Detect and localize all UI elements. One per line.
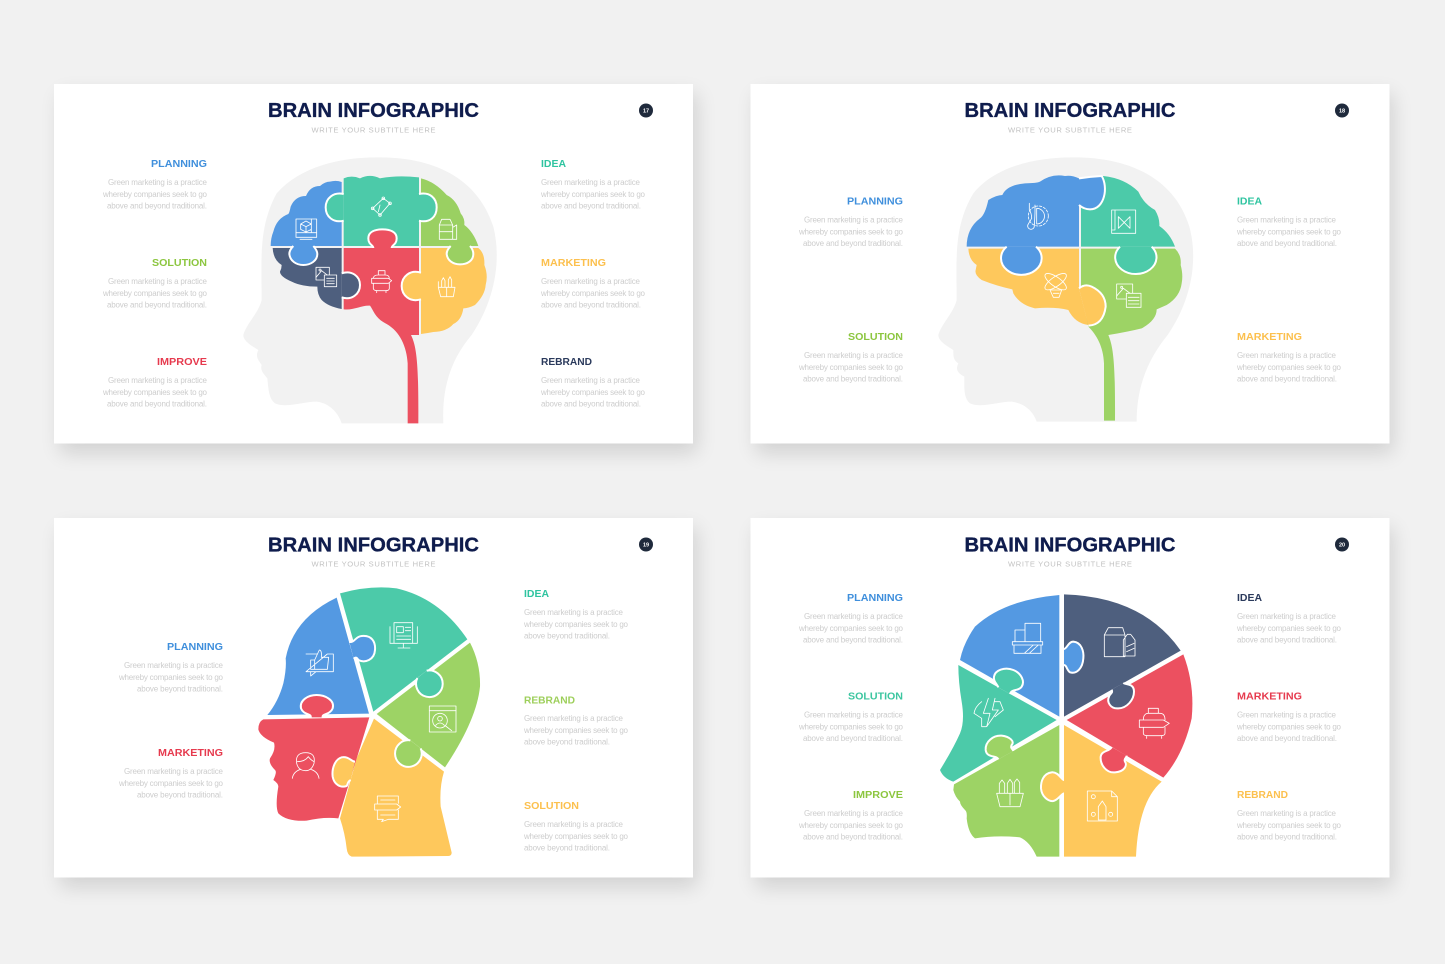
page number: 19 <box>643 542 649 548</box>
text block: improve: Green marketing is a practice <box>804 809 904 818</box>
icon: search browser <box>429 706 456 732</box>
tab: yellow into green <box>1079 285 1106 326</box>
text block: solution: SOLUTION <box>848 332 903 343</box>
card shadow <box>756 94 1393 453</box>
icon: plant pot with pencils <box>438 277 455 297</box>
icon: thumbs up <box>306 650 333 676</box>
text block: idea: whereby companies seek to go <box>1236 624 1342 633</box>
text block: solution <box>798 332 904 384</box>
card <box>54 84 693 444</box>
piece: red <box>1067 654 1192 778</box>
card shadow <box>60 528 697 887</box>
text block: idea: whereby companies seek to go <box>1236 228 1342 236</box>
text block: idea: whereby companies seek to go <box>523 620 629 629</box>
tab: teal into blue <box>326 194 344 221</box>
brain puzzle diagram <box>938 157 1193 422</box>
panel: slide 20 <box>750 518 1393 887</box>
text block: rebrand: REBRAND <box>541 357 592 368</box>
icon: vector pen <box>371 197 391 216</box>
text block: marketing <box>1236 332 1342 384</box>
head silhouette <box>243 157 497 423</box>
panel: slide 18 <box>750 84 1393 453</box>
title: BRAIN INFOGRAPHIC <box>964 100 1176 122</box>
piece: green <box>953 725 1059 857</box>
icon: briefcase pencil <box>1139 708 1169 738</box>
tab: slate into red <box>342 272 360 298</box>
icon: monitor with cube <box>296 219 317 239</box>
text block: marketing: whereby companies seek to go <box>1236 363 1342 372</box>
text block: marketing: MARKETING <box>1237 692 1302 702</box>
tab: blue top right lobe <box>1079 176 1105 209</box>
text block: idea: IDEA <box>1237 593 1263 604</box>
text block: planning: PLANNING <box>847 593 903 604</box>
text block: solution: Green marketing is a practice <box>804 351 904 360</box>
icon: lightning brain <box>974 698 1003 727</box>
tab: red into yellow <box>1101 747 1127 772</box>
page number <box>1335 104 1349 118</box>
text block: idea: Green marketing is a practice <box>541 178 641 187</box>
text block: improve <box>102 357 208 408</box>
text block: solution: SOLUTION <box>152 258 207 269</box>
tab: green into teal <box>986 736 1013 759</box>
tab: teal into green <box>419 194 437 221</box>
text block: rebrand: whereby companies seek to go <box>523 726 629 735</box>
text block: planning: PLANNING <box>151 159 207 170</box>
icon: woman portrait <box>292 753 319 778</box>
text block: idea: Green marketing is a practice <box>1237 216 1337 224</box>
text block: marketing: Green marketing is a practice <box>541 277 641 286</box>
icon: news monitor <box>390 623 417 648</box>
text block: idea: Green marketing is a practice <box>524 608 624 617</box>
brain puzzle diagram <box>243 157 497 423</box>
piece: blue <box>271 181 342 246</box>
piece: blue <box>267 598 369 715</box>
head puzzle diagram <box>258 587 480 857</box>
text block: planning: Green marketing is a practice <box>804 612 904 621</box>
card <box>750 518 1390 878</box>
text block: marketing: Green marketing is a practice <box>124 767 224 776</box>
piece: teal <box>340 587 467 712</box>
text block: idea <box>540 159 646 210</box>
text block: planning: Green marketing is a practice <box>108 178 208 187</box>
text block: solution: whereby companies seek to go <box>523 832 629 841</box>
piece: green with stem <box>1081 249 1182 421</box>
icon: images and sliders <box>1117 284 1141 307</box>
text block: idea: Green marketing is a practice <box>1237 612 1337 621</box>
text block: planning: above beyond traditional. <box>137 684 223 694</box>
tab: blue into slate <box>289 246 317 265</box>
text block: rebrand: Green marketing is a practice <box>524 714 624 723</box>
subtitle: WRITE YOUR SUBTITLE HERE <box>312 560 436 568</box>
text block: rebrand: Green marketing is a practice <box>541 376 641 385</box>
tab: teal into green <box>1115 247 1156 274</box>
text block: solution: Green marketing is a practice <box>804 710 904 720</box>
page number: 18 <box>1339 108 1345 114</box>
tab: blue into yellow <box>1001 247 1042 275</box>
text block: marketing: whereby companies seek to go <box>118 779 224 788</box>
text block: improve: Green marketing is a practice <box>108 376 208 385</box>
tab: green into yellow <box>395 740 422 767</box>
text block: rebrand: whereby companies seek to go <box>1236 821 1342 830</box>
tab: red into teal <box>368 229 397 248</box>
text block: marketing <box>1236 692 1342 743</box>
text block: idea: above and beyond traditional. <box>541 202 641 210</box>
text block: solution: whereby companies seek to go <box>102 289 208 298</box>
text block: marketing: above and beyond traditional. <box>1237 734 1337 743</box>
text block: idea: whereby companies seek to go <box>540 190 646 199</box>
text block: idea: above and beyond traditional. <box>1237 239 1337 248</box>
text block: marketing: above and beyond traditional. <box>541 300 641 310</box>
icon: containers <box>1012 623 1043 653</box>
icon: blueprint <box>1112 210 1136 233</box>
text block: marketing: MARKETING <box>158 748 223 759</box>
text block: planning <box>798 593 904 644</box>
piece: yellow <box>1064 725 1162 857</box>
text block: solution: above and beyond traditional. <box>803 734 903 743</box>
text block: solution: Green marketing is a practice <box>524 820 624 829</box>
piece: yellow <box>968 249 1088 325</box>
page number: 20 <box>1339 542 1345 548</box>
text block: idea: above beyond traditional. <box>524 632 610 640</box>
tab: yellow into green <box>1041 772 1064 801</box>
text block: marketing <box>540 258 646 310</box>
text block: planning: whereby companies seek to go <box>798 228 904 236</box>
text block: planning: above and beyond traditional. <box>803 636 903 644</box>
text block: idea <box>1236 196 1342 248</box>
card shadow <box>60 94 697 453</box>
text block: improve: whereby companies seek to go <box>102 388 208 397</box>
piece: slate <box>1064 594 1181 717</box>
text block: planning <box>118 642 224 694</box>
icon: images and sliders <box>316 267 337 287</box>
tab: teal into green <box>416 670 443 697</box>
text block: planning: PLANNING <box>847 196 903 208</box>
title: BRAIN INFOGRAPHIC <box>964 534 1176 556</box>
icon: packages <box>439 219 457 239</box>
text block: solution: above beyond traditional. <box>524 844 610 852</box>
page number <box>639 538 653 552</box>
piece: teal <box>1081 176 1175 247</box>
text block: solution <box>102 258 208 310</box>
text block: marketing: above beyond traditional. <box>137 790 223 800</box>
text block: planning: PLANNING <box>167 642 223 653</box>
icon: wrench gear <box>1028 203 1048 229</box>
text block: rebrand <box>1236 790 1342 842</box>
text block: planning: above and beyond traditional. <box>107 202 207 210</box>
text block: solution: above and beyond traditional. <box>107 300 207 310</box>
text block: improve <box>798 790 904 842</box>
text block: improve: IMPROVE <box>157 357 207 368</box>
text block: planning: whereby companies seek to go <box>118 673 224 682</box>
text block: rebrand: above and beyond traditional. <box>541 400 641 408</box>
piece: red <box>258 717 369 821</box>
card <box>750 84 1390 444</box>
text block: solution: above and beyond traditional. <box>803 374 903 384</box>
piece: blue <box>960 595 1059 717</box>
icon: sketch plan <box>1087 791 1117 821</box>
text block: planning: whereby companies seek to go <box>102 190 208 199</box>
subtitle: WRITE YOUR SUBTITLE HERE <box>1008 560 1132 568</box>
piece: yellow <box>340 719 452 857</box>
piece: green <box>377 643 480 767</box>
text block: marketing: whereby companies seek to go <box>1236 722 1342 732</box>
text block: improve: above and beyond traditional. <box>107 400 207 408</box>
tab: blue into slate <box>1064 642 1083 673</box>
text block: planning: Green marketing is a practice <box>124 661 224 670</box>
tab: yellow into red <box>402 272 421 300</box>
tab: teal into blue <box>994 669 1023 694</box>
text block: improve: whereby companies seek to go <box>798 821 904 830</box>
page number: 17 <box>643 108 649 114</box>
icon: pencil pot <box>997 779 1023 807</box>
head silhouette <box>938 157 1193 422</box>
text block: planning <box>798 196 904 248</box>
tab: green into yellow <box>447 246 473 264</box>
subtitle: WRITE YOUR SUBTITLE HERE <box>1008 126 1132 134</box>
text block: marketing: Green marketing is a practice <box>1237 710 1337 720</box>
text block: idea: IDEA <box>524 589 550 600</box>
text block: marketing: MARKETING <box>541 258 606 269</box>
title: BRAIN INFOGRAPHIC <box>268 534 479 556</box>
text block: marketing: whereby companies seek to go <box>540 289 646 298</box>
text block: marketing: Green marketing is a practice <box>1237 351 1337 360</box>
text block: solution <box>798 692 904 743</box>
panel: slide 17 <box>54 84 697 453</box>
text block: rebrand <box>540 357 646 408</box>
title: BRAIN INFOGRAPHIC <box>268 100 479 122</box>
tab: red into blue <box>301 695 333 717</box>
tab: yellow into red <box>332 757 355 787</box>
tab: blue into teal <box>349 636 375 661</box>
text block: rebrand: REBRAND <box>1237 790 1288 801</box>
icon: briefcase pencil <box>372 271 392 293</box>
piece: teal <box>344 176 419 246</box>
text block: marketing: MARKETING <box>1237 332 1302 343</box>
text block: rebrand: above beyond traditional. <box>524 738 610 746</box>
text block: idea: IDEA <box>1237 196 1263 208</box>
head puzzle diagram <box>940 594 1192 857</box>
piece: teal <box>940 665 1057 782</box>
subtitle: WRITE YOUR SUBTITLE HERE <box>312 126 436 134</box>
text block: rebrand: REBRAND <box>524 696 575 706</box>
text block: rebrand: whereby companies seek to go <box>540 388 646 397</box>
piece: green <box>421 178 478 246</box>
text block: improve: IMPROVE <box>853 790 903 801</box>
text block: solution <box>523 801 629 852</box>
card shadow <box>756 528 1393 887</box>
text block: rebrand <box>523 696 629 746</box>
page number <box>639 104 653 118</box>
text block: rebrand: Green marketing is a practice <box>1237 809 1337 818</box>
text block: improve: above and beyond traditional. <box>803 832 903 842</box>
text block: idea: IDEA <box>541 159 567 170</box>
text block: solution: SOLUTION <box>524 801 579 812</box>
text block: planning: above and beyond traditional. <box>803 239 903 248</box>
text block: rebrand: above and beyond traditional. <box>1237 832 1337 842</box>
text block: idea <box>523 589 629 640</box>
piece: slate <box>273 248 342 309</box>
icon: packages <box>1104 628 1135 657</box>
card <box>54 518 693 878</box>
icon: bulb globe <box>1043 271 1069 297</box>
text block: solution: Green marketing is a practice <box>108 277 208 286</box>
text block: planning: whereby companies seek to go <box>798 624 904 633</box>
icon: message pencil <box>375 796 401 822</box>
text block: planning <box>102 159 208 210</box>
text block: idea <box>1236 593 1342 644</box>
text block: marketing <box>118 748 224 800</box>
page number <box>1335 538 1349 552</box>
piece: yellow <box>421 248 487 334</box>
tab: slate into red <box>1108 683 1134 708</box>
text block: solution: whereby companies seek to go <box>798 722 904 732</box>
text block: marketing: above and beyond traditional. <box>1237 374 1337 384</box>
piece: red with stem <box>344 248 419 423</box>
text block: solution: SOLUTION <box>848 692 903 702</box>
text block: planning: Green marketing is a practice <box>804 216 904 224</box>
panel: slide 19 <box>54 518 697 887</box>
text block: solution: whereby companies seek to go <box>798 363 904 372</box>
text block: idea: above and beyond traditional. <box>1237 636 1337 644</box>
piece: blue <box>967 175 1079 247</box>
